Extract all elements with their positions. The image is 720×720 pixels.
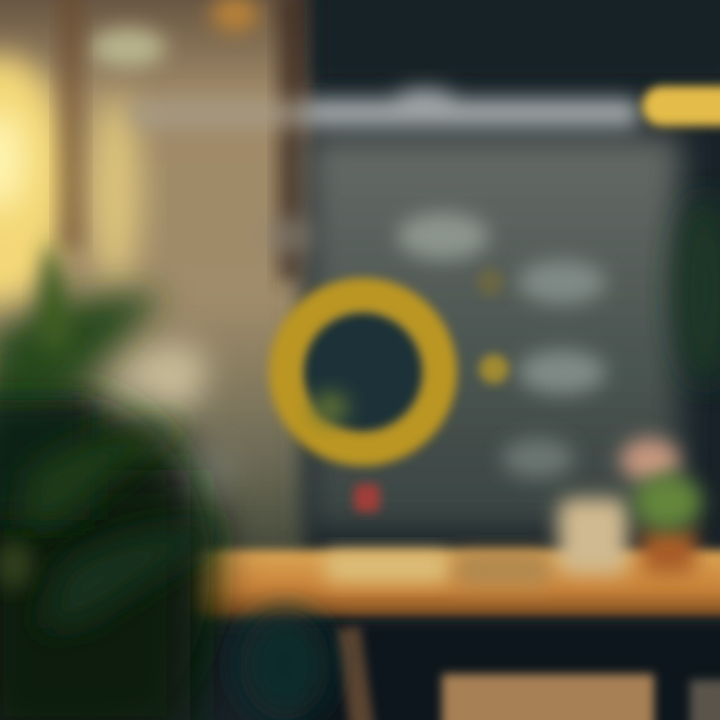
panel: window at left xyxy=(0,0,306,620)
table top xyxy=(190,550,720,616)
icon: potted plant xyxy=(620,438,702,574)
text block: right label three xyxy=(502,438,574,478)
chart: gold donut xyxy=(286,295,440,449)
icon: marker upper xyxy=(476,268,504,296)
table underside and legs xyxy=(300,624,720,720)
plant: right background foliage xyxy=(675,195,720,385)
icon: white cup xyxy=(558,498,628,574)
plant: foreground fern xyxy=(0,240,330,720)
text block: left label xyxy=(264,216,312,256)
panel: chalkboard xyxy=(308,135,680,530)
text block: upper label xyxy=(397,212,489,260)
panel: dark top band xyxy=(316,0,720,85)
icon: red marker xyxy=(354,484,380,512)
icon: marker middle xyxy=(479,354,509,384)
text block: right label one xyxy=(518,260,606,304)
text block: right label two xyxy=(518,350,606,394)
heading: blurred title band xyxy=(130,88,640,128)
icon: lamp glow top right xyxy=(642,86,720,126)
